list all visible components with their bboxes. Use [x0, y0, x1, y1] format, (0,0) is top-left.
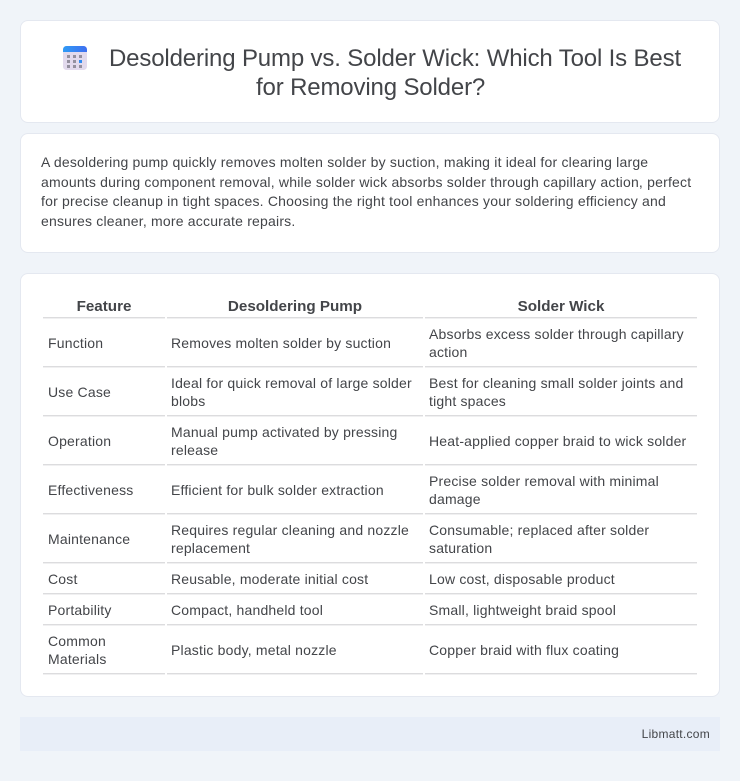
- comparison table: [43, 298, 697, 675]
- title: for Removing Solder?: [256, 74, 485, 101]
- comparison table: Operation: [48, 433, 111, 449]
- comparison table: Compact, handheld tool: [171, 602, 323, 618]
- comparison table: Low cost, disposable product: [429, 571, 615, 587]
- comparison table: Effectiveness: [48, 482, 133, 498]
- intro paragraph: ensures cleaner, more accurate repairs.: [41, 213, 295, 229]
- intro paragraph: [41, 154, 692, 229]
- comparison table: Precise solder removal with minimal: [429, 473, 659, 489]
- intro paragraph: A desoldering pump quickly removes molten solder by suction, making it ideal for clearing large: [41, 154, 648, 170]
- comparison table: replacement: [171, 540, 250, 556]
- comparison table: release: [171, 442, 218, 458]
- panel: comparison table: [20, 273, 720, 697]
- intro paragraph: for precise cleanup in tight spaces. Choosing the right tool enhances your soldering efficiency and: [41, 193, 666, 209]
- comparison table: Small, lightweight braid spool: [429, 602, 616, 618]
- comparison table: damage: [429, 491, 481, 507]
- footer credit: Libmatt.com: [642, 727, 710, 741]
- table header: Solder Wick: [518, 298, 604, 315]
- comparison table: Common: [48, 633, 106, 649]
- table header: Feature: [77, 298, 131, 315]
- comparison table: tight spaces: [429, 393, 506, 409]
- intro paragraph: amounts during component removal, while solder wick absorbs solder through capillary action, perfect: [41, 174, 691, 190]
- comparison table: Ideal for quick removal of large solder: [171, 375, 412, 391]
- comparison table: Plastic body, metal nozzle: [171, 642, 337, 658]
- comparison table: blobs: [171, 393, 205, 409]
- comparison table: Best for cleaning small solder joints and: [429, 375, 683, 391]
- comparison table: Efficient for bulk solder extraction: [171, 482, 384, 498]
- footer bar: [20, 717, 720, 751]
- comparison table: Portability: [48, 602, 112, 618]
- title: Desoldering Pump vs. Solder Wick: Which Tool Is Best: [109, 45, 681, 72]
- comparison table: Consumable; replaced after solder: [429, 522, 649, 538]
- comparison table: Use Case: [48, 384, 111, 400]
- panel: title card: [20, 20, 720, 123]
- comparison table: Materials: [48, 651, 107, 667]
- panel: intro text: [20, 133, 720, 253]
- comparison table: Reusable, moderate initial cost: [171, 571, 368, 587]
- comparison table: Copper braid with flux coating: [429, 642, 619, 658]
- comparison table: Absorbs excess solder through capillary: [429, 326, 684, 342]
- comparison table: saturation: [429, 540, 492, 556]
- comparison table: Manual pump activated by pressing: [171, 424, 398, 440]
- comparison table: Function: [48, 335, 103, 351]
- title: [109, 45, 681, 101]
- table header: Desoldering Pump: [228, 298, 362, 315]
- comparison table: action: [429, 344, 468, 360]
- icon: calendar: [63, 46, 87, 70]
- comparison table: Heat-applied copper braid to wick solder: [429, 433, 686, 449]
- comparison table: Removes molten solder by suction: [171, 335, 391, 351]
- comparison table: Cost: [48, 571, 78, 587]
- comparison table: Maintenance: [48, 531, 130, 547]
- table header: [77, 298, 604, 315]
- comparison table: Requires regular cleaning and nozzle: [171, 522, 409, 538]
